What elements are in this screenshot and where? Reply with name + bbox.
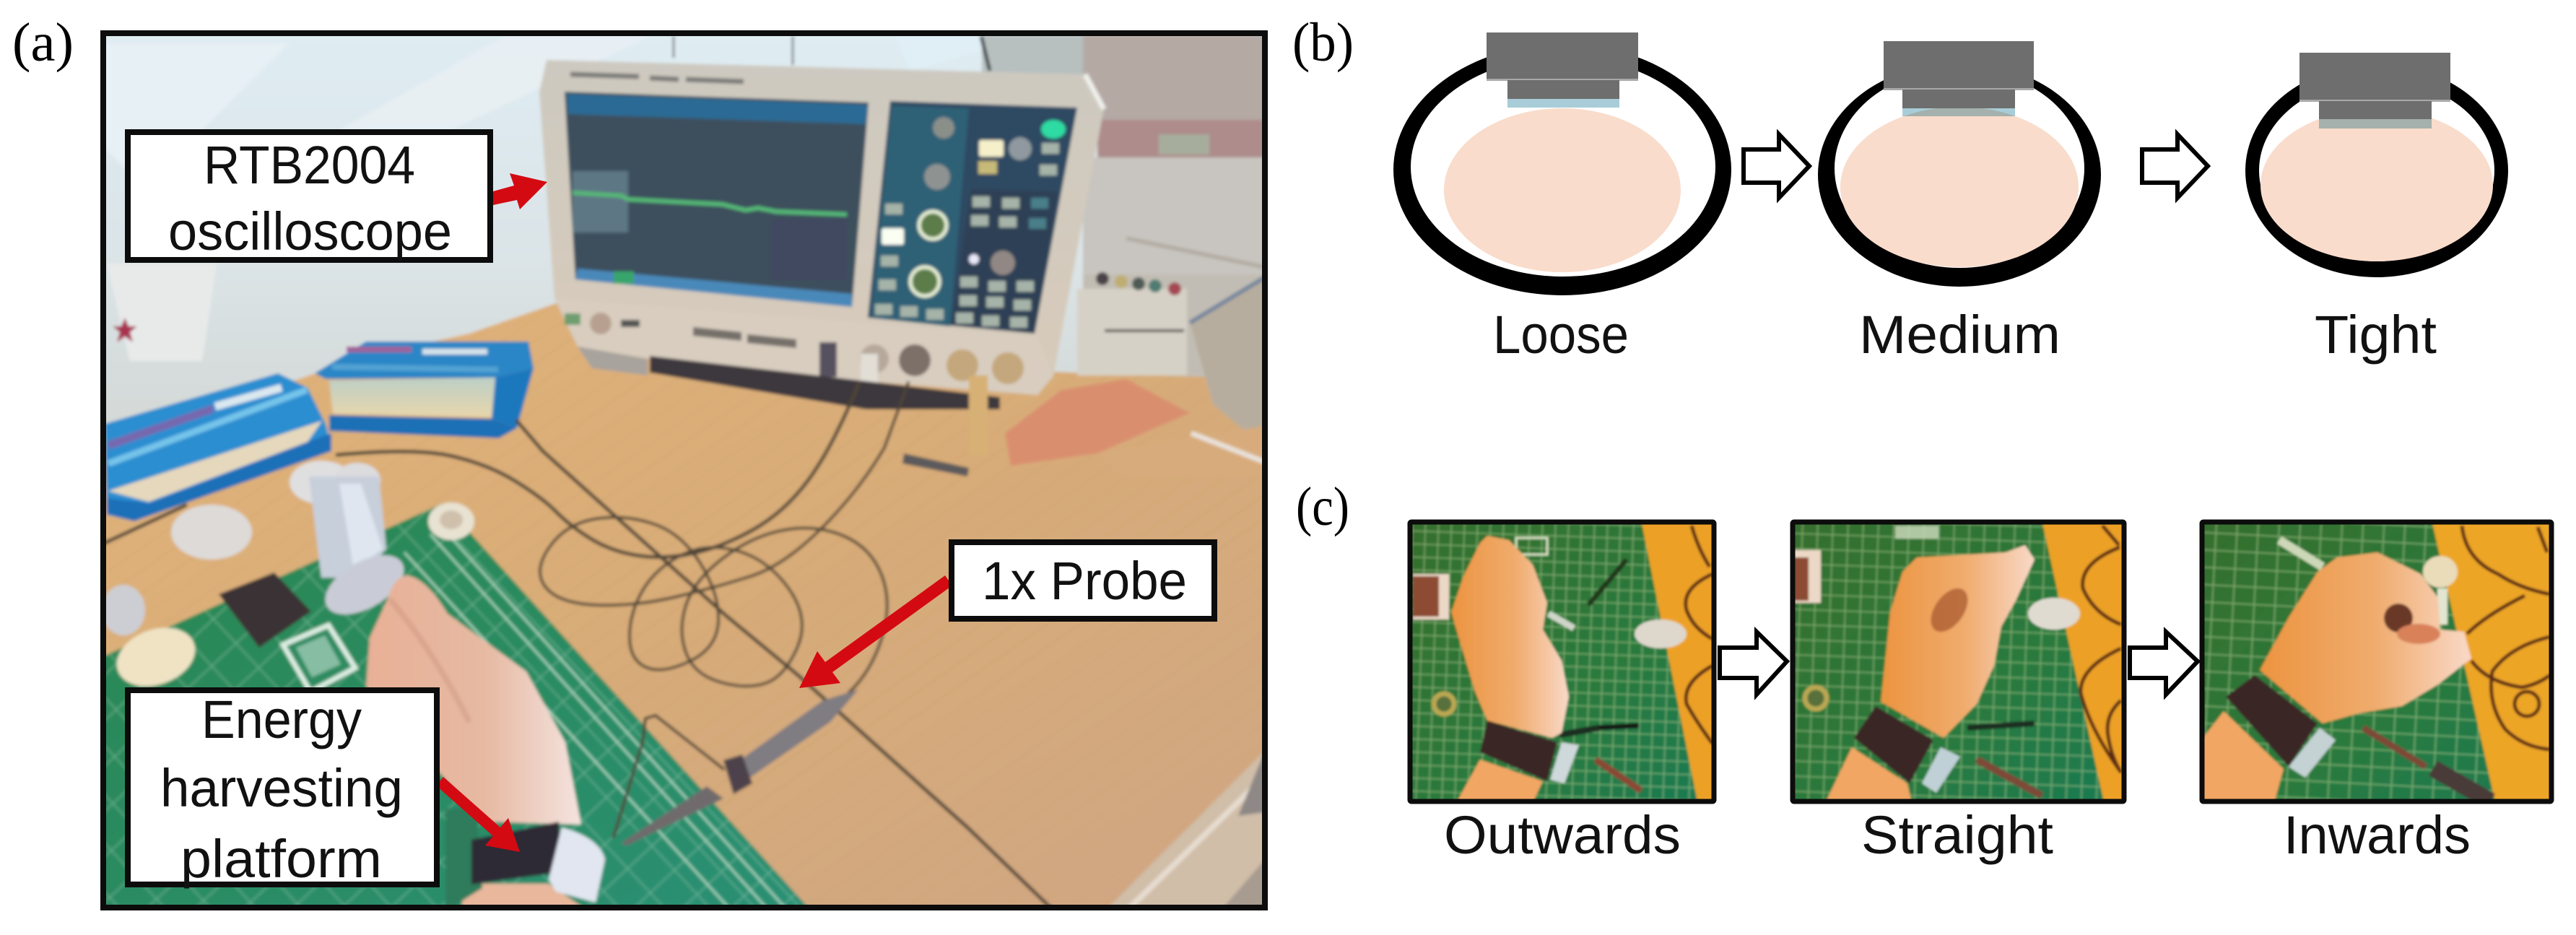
background right: notes and shelf xyxy=(1083,35,1271,121)
black tool on mat xyxy=(219,573,311,648)
arrow: to platform xyxy=(436,777,520,852)
watch strap xyxy=(471,822,562,884)
panel label (a): (a) xyxy=(12,12,74,73)
panel c: wrist pose photographs xyxy=(1408,520,2556,865)
forearm xyxy=(459,881,585,905)
scope base shadow xyxy=(650,356,1000,409)
label: Inwards: Inwards xyxy=(2284,805,2471,865)
scope control panel xyxy=(868,101,1077,334)
panel b: strap tightness diagrams xyxy=(1393,32,2508,365)
scope front connectors xyxy=(565,313,580,325)
watch body xyxy=(549,827,605,903)
callout: RTB2004 oscilloscope xyxy=(128,132,490,261)
panel label (c): (c) xyxy=(1296,477,1349,537)
label: Outwards: Outwards xyxy=(1444,805,1681,865)
callout: RTB2004 oscilloscope: oscilloscope xyxy=(168,201,452,261)
callout: RTB2004 oscilloscope: RTB2004 xyxy=(204,135,415,195)
photo scene xyxy=(101,32,1271,911)
arrow: medium to tight xyxy=(2142,134,2208,198)
panel a: lab setup photograph xyxy=(101,32,1271,911)
callout: Energy harvesting platform: harvesting xyxy=(160,758,403,818)
diagram: medium xyxy=(1818,41,2101,365)
callout: Energy harvesting platform: platform xyxy=(180,829,382,889)
scope body xyxy=(539,60,1104,395)
blue case left xyxy=(105,373,331,521)
star sticker xyxy=(113,318,137,342)
cables xyxy=(105,383,1051,908)
panel label (b): (b) xyxy=(1292,12,1354,73)
photo: outwards xyxy=(1408,520,1718,865)
desk xyxy=(102,303,1271,911)
photo: straight xyxy=(1790,520,2130,865)
callout: Energy harvesting platform xyxy=(128,690,437,889)
blue case right xyxy=(315,342,534,379)
cutting mat xyxy=(102,503,811,911)
label: Medium: Medium xyxy=(1859,305,2061,365)
cups xyxy=(428,503,474,540)
breadboard xyxy=(1077,289,1187,375)
label: Tight: Tight xyxy=(2315,305,2437,365)
hand xyxy=(366,575,581,825)
arrow: outwards to straight xyxy=(1720,632,1787,695)
callout: 1x Probe xyxy=(952,542,1214,619)
arrow: straight to inwards xyxy=(2130,632,2198,695)
copper sheet xyxy=(1005,379,1190,466)
photo frame xyxy=(103,33,1265,908)
diagram: tight xyxy=(2245,53,2508,365)
photo: inwards xyxy=(2198,520,2556,865)
arrow: loose to medium xyxy=(1744,134,1809,198)
callout: Energy harvesting platform: Energy xyxy=(201,690,362,749)
arrow: to oscilloscope xyxy=(493,173,547,209)
callout: 1x Probe: 1x Probe xyxy=(982,551,1187,611)
rs logo xyxy=(283,625,355,692)
label: Loose: Loose xyxy=(1493,305,1629,365)
arrow: to probe xyxy=(799,575,952,688)
diagram: loose xyxy=(1393,32,1731,365)
white gears and tower xyxy=(171,505,252,560)
wall background xyxy=(106,36,1098,445)
loose rod xyxy=(902,453,969,477)
clear box at right xyxy=(1191,282,1262,430)
label: Straight: Straight xyxy=(1861,805,2053,865)
scope screen xyxy=(565,92,869,307)
plastic corner xyxy=(1105,751,1265,911)
probes xyxy=(736,690,858,780)
